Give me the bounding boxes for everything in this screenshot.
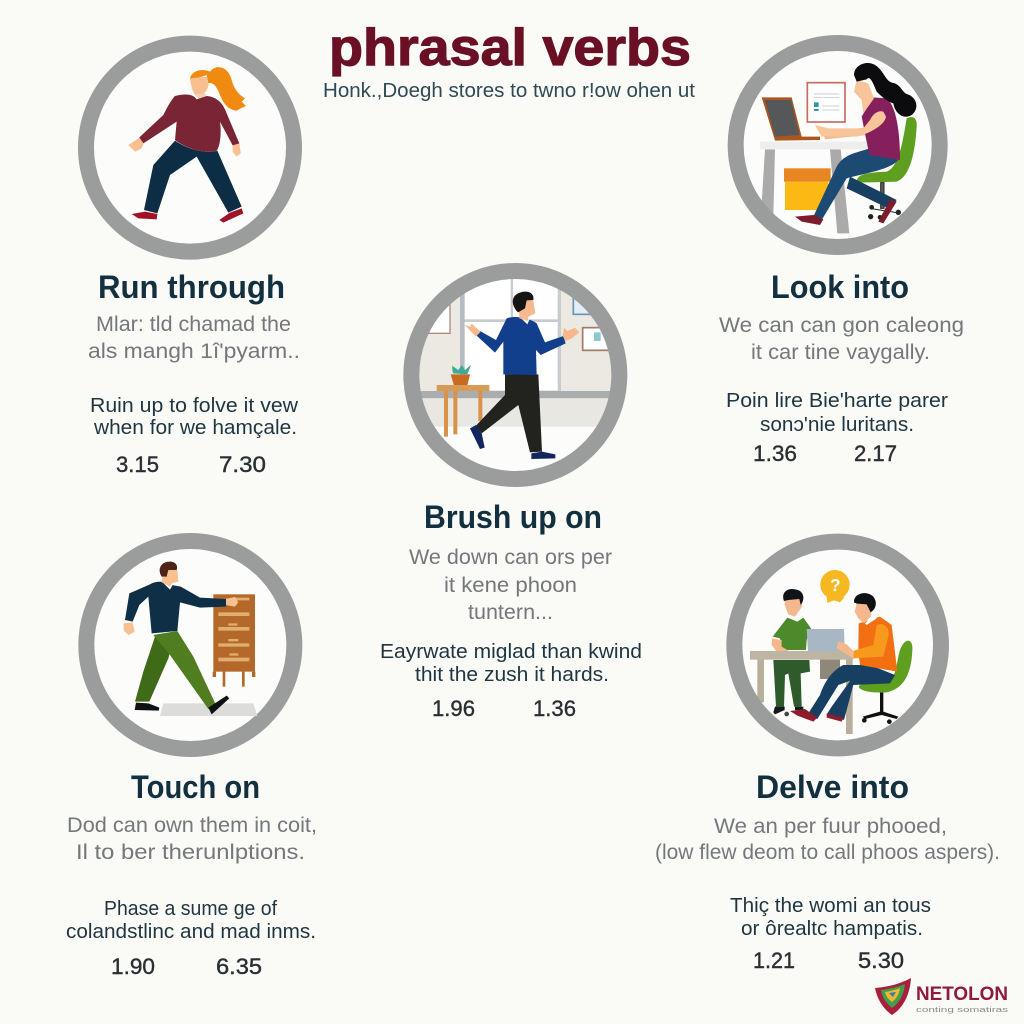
description: Mlar: tld chamad the xyxy=(96,313,291,336)
icon: two people at a table: ? xyxy=(830,575,841,595)
numbers: 1.21 xyxy=(753,948,795,973)
example: Phase a sume ge of xyxy=(104,898,277,920)
description: (low flew deom to call phoos aspers). xyxy=(655,841,1000,864)
description xyxy=(409,546,612,624)
numbers: 1.36 xyxy=(753,441,797,466)
panel: Look into xyxy=(719,43,964,466)
example: Thiç the womi an tous xyxy=(730,895,931,917)
icon: woman walking xyxy=(86,44,294,252)
panel: Brush up on xyxy=(380,271,642,721)
example: sonɔ'nie luritans. xyxy=(760,414,914,436)
heading: Look into xyxy=(771,269,909,305)
description xyxy=(719,314,964,364)
logo name: NETOLON xyxy=(916,984,1008,1005)
description xyxy=(67,814,317,864)
title: phrasal verbs xyxy=(329,19,691,77)
description: We can can gon caleong xyxy=(719,314,964,337)
example: Ruin up to folve it vew xyxy=(90,395,299,417)
example: colandstlinc and mad inms. xyxy=(66,921,316,943)
description: tuntern... xyxy=(468,601,553,624)
description xyxy=(88,313,300,363)
logo tagline: conting somatiras xyxy=(916,1007,1009,1014)
description: it kene phoon xyxy=(444,574,577,597)
numbers: 1.96 xyxy=(432,696,475,721)
example xyxy=(66,898,316,943)
heading: Brush up on xyxy=(424,499,602,535)
example xyxy=(380,641,642,686)
description: als mangh 1î'pyarm.. xyxy=(88,340,300,363)
example xyxy=(730,895,931,940)
example: thit the zush it hards. xyxy=(415,664,609,686)
heading: Delve into xyxy=(756,769,909,805)
numbers: 1.36 xyxy=(533,696,576,721)
numbers xyxy=(753,948,904,973)
numbers xyxy=(753,441,897,466)
numbers: 7.30 xyxy=(219,452,266,477)
description: it car tine vaygally. xyxy=(751,341,930,364)
heading: Touch on xyxy=(131,769,260,805)
numbers: 1.90 xyxy=(111,954,155,979)
description: Dod can own them in coit, xyxy=(67,814,317,837)
panel: Run through xyxy=(86,44,300,477)
description: We an per fuur phooed, xyxy=(714,815,947,838)
numbers: 5.30 xyxy=(858,948,904,973)
icon: woman at desk xyxy=(736,43,940,247)
subtitle: Honk.,Doegh stores to twno r!ow ohen ut xyxy=(323,80,695,102)
numbers xyxy=(116,452,266,477)
numbers: 2.17 xyxy=(854,441,897,466)
heading: Run through xyxy=(98,269,285,305)
panel: Delve into xyxy=(655,542,1000,973)
description: We down can ors per xyxy=(409,546,612,569)
icon: logo shield xyxy=(875,978,911,1015)
icon: man walking in room xyxy=(410,271,623,479)
icon: man pointing at dresser xyxy=(86,541,294,749)
description xyxy=(655,815,1000,864)
example: or ôrealtc hampatis. xyxy=(741,918,923,940)
example xyxy=(90,395,299,439)
numbers: 6.35 xyxy=(216,954,262,979)
description: Il to ber therunlptions. xyxy=(76,841,305,864)
numbers: 3.15 xyxy=(116,452,159,477)
logo xyxy=(875,978,1009,1015)
numbers xyxy=(432,696,576,721)
example xyxy=(726,390,948,436)
example: Poin lire Bie'harte parer xyxy=(726,390,948,412)
numbers xyxy=(111,954,262,979)
panel: Touch on xyxy=(66,541,317,979)
example: when for we hamçale. xyxy=(93,417,297,439)
example: Eayrwate miglad than kwind xyxy=(380,641,642,663)
icon: two people at a table xyxy=(734,542,941,748)
